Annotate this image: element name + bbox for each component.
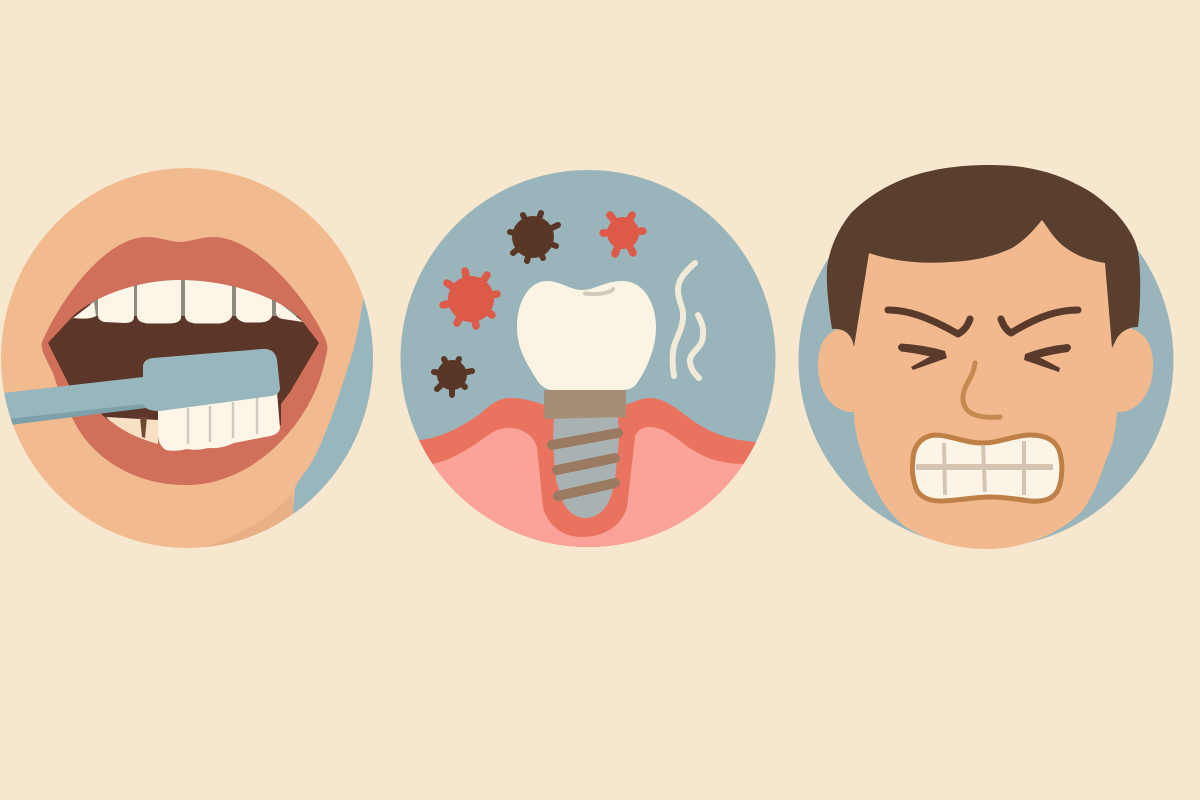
- blue corner: [293, 300, 373, 514]
- crown highlight: [585, 289, 613, 294]
- face: [854, 215, 1117, 549]
- hair: [827, 165, 1140, 348]
- right eye: [1024, 344, 1071, 372]
- eyebrows: [888, 310, 1078, 334]
- screw body: [553, 415, 619, 518]
- jaw shadow: [204, 494, 293, 548]
- bacteria: [434, 213, 643, 395]
- panel: toothbrushing mouth: [1, 168, 380, 552]
- teeth and lip outline: [912, 435, 1062, 501]
- mouth interior: [48, 280, 319, 435]
- germ: red left: [443, 271, 497, 326]
- gum inner: [432, 427, 744, 547]
- left ear: [818, 327, 856, 412]
- lower back teeth: [106, 417, 158, 444]
- left eye: [898, 344, 947, 370]
- tooth lines: [916, 464, 1053, 470]
- tooth gap: [140, 417, 147, 438]
- gum outer: [419, 398, 756, 547]
- implant collar: [544, 390, 626, 419]
- germ: red top: [603, 215, 643, 254]
- lips: [42, 237, 327, 485]
- toothbrush: [3, 349, 280, 425]
- implant screw: [552, 415, 619, 518]
- germ: dark lower: [434, 359, 472, 395]
- left eyebrow: [888, 310, 970, 334]
- face background: [1, 168, 373, 548]
- lower tooth dividers: [188, 398, 257, 444]
- infographic: three dental icons: [1, 165, 1174, 549]
- background: [798, 172, 1174, 548]
- toothbrush body: [3, 349, 280, 425]
- odour wavy lines: [673, 263, 703, 378]
- screw threads: [552, 433, 618, 496]
- mouth: [912, 435, 1062, 501]
- wavy line short: [690, 315, 703, 378]
- handle shadow: [8, 404, 146, 425]
- background: [395, 165, 785, 555]
- right eyebrow: [1001, 310, 1078, 333]
- upper teeth: [68, 278, 303, 324]
- germ: dark top: [510, 213, 558, 261]
- nose: [963, 363, 1000, 417]
- panel: dental implant with bacteria: [395, 165, 785, 560]
- panel: man grimacing: [798, 165, 1174, 549]
- right ear: [1115, 327, 1153, 412]
- lower front teeth: [158, 392, 280, 451]
- crown: [517, 281, 656, 390]
- wavy line long: [673, 263, 695, 376]
